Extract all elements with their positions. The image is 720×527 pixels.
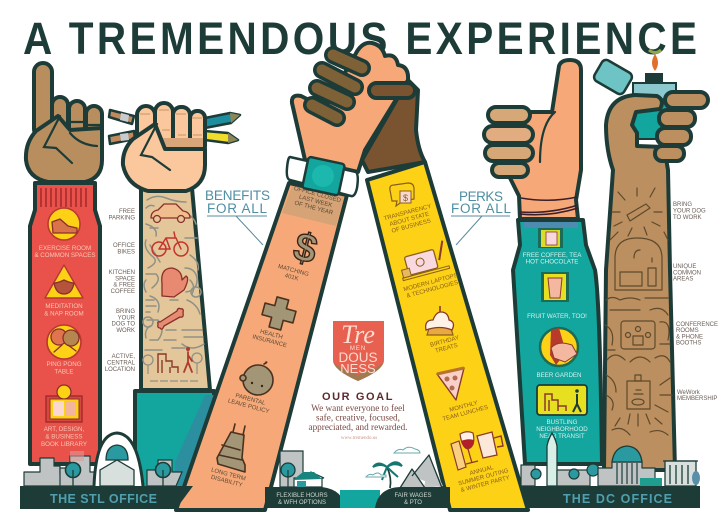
labels: DC perks list: ROOMS — [676, 328, 699, 334]
labels: STL benefits list: BIKES — [117, 250, 135, 256]
text: goal statement: safe, creative, focused, — [316, 412, 400, 422]
icon: laptop — [396, 241, 450, 281]
icon: pointing hand — [26, 63, 102, 182]
water — [340, 490, 380, 508]
text: goal statement: appreciated, and rewarded. — [309, 422, 407, 432]
icon: handshake peach hand — [292, 43, 408, 172]
text: health insurance: INSURANCE — [252, 334, 287, 349]
text: exercise room: EXERCISE ROOM — [39, 245, 91, 252]
text: benefits for all: BENEFITS — [205, 188, 270, 203]
icon: thumbs up hand — [484, 60, 581, 219]
text: perks for all: FOR ALL — [451, 201, 511, 216]
icon: baby face — [240, 362, 273, 395]
text: art, design: BOOK LIBRARY — [41, 441, 87, 448]
text: art, design: ART, DESIGN, — [44, 426, 84, 433]
icon: watch — [287, 157, 358, 196]
icon: bracelets — [520, 197, 578, 215]
title: A TREMENDOUS EXPERIENCE — [23, 14, 697, 65]
text: matching 401k: MATCHING — [277, 264, 309, 278]
labels: DC perks list: WeWork — [677, 390, 700, 396]
text: long term disability: DISABILITY — [210, 475, 243, 489]
text: office closed: OF THE YEAR — [294, 201, 334, 217]
tattoo: common room arch — [606, 232, 668, 315]
text: parental leave: LEAVE POLICY — [227, 398, 270, 415]
text: free coffee: HOT CHOCOLATE — [526, 258, 578, 266]
icon: tremendousness shield logo: DOUS — [338, 350, 378, 365]
panel: flexible hours vignette: & WFH OPTIONS — [278, 500, 326, 506]
text: fruit water: FRUIT WATER, TOO! — [527, 313, 587, 320]
text: bustling neighborhood: NEAR TRANSIT — [539, 433, 585, 440]
labels: STL benefits list: & FREE — [113, 283, 135, 289]
icon: shoe badge — [48, 208, 80, 240]
text: monthly team lunches: TEAM LUNCHES — [442, 405, 489, 423]
maze pattern — [145, 196, 204, 350]
labels: STL benefits list: KITCHEN — [109, 270, 135, 276]
labels: DC perks list: COMMON — [673, 270, 701, 276]
text: meditation: MEDITATION — [45, 303, 83, 310]
labels: DC perks list: MEMBERSHIP — [677, 396, 717, 402]
icon: oven mitt — [162, 268, 188, 297]
text: exercise room: & COMMON SPACES — [34, 252, 96, 259]
labels: DC perks list: AREAS — [673, 277, 693, 283]
text: transparency: OF BUSINESS — [391, 218, 432, 235]
text: birthday treats: TREATS — [435, 343, 459, 355]
text: birthday treats: BIRTHDAY — [430, 335, 460, 349]
text: transparency: TRANSPARENCY — [383, 204, 432, 222]
panel: our goal — [309, 320, 407, 441]
icon: beer garden badge — [540, 328, 578, 366]
labels: DC perks list: YOUR DOG — [673, 208, 706, 214]
labels: STL benefits list — [105, 209, 136, 373]
panel: fair wages vignette: & PTO — [404, 500, 422, 506]
labels: STL benefits list: WORK — [116, 328, 135, 334]
text: meditation: & NAP ROOM — [44, 310, 84, 317]
text: ping pong: PING PONG — [46, 361, 82, 368]
text: annual outing: & WINTER PARTY — [460, 475, 511, 494]
panel: brown hand and palm — [362, 80, 425, 172]
labels: STL benefits list: BRING — [116, 309, 135, 315]
text: perks for all: PERKS — [459, 189, 503, 204]
text: long term disability: LONG TERM — [210, 468, 246, 483]
icon: tremendousness shield logo: Tre — [341, 320, 375, 349]
text: transparency: ABOUT STATE — [389, 212, 430, 228]
labels: STL benefits list: ACTIVE, — [112, 354, 135, 360]
labels: DC perks list: BRING — [673, 202, 692, 208]
text: url: www.tremendo.us — [341, 436, 377, 441]
labels: STL benefits list: SPACE — [115, 276, 135, 282]
labels: STL benefits list: LOCATION — [105, 367, 135, 373]
panel: fair wages vignette: FAIR WAGES — [394, 493, 432, 499]
text: annual outing: SUMMER OUTING — [458, 468, 510, 487]
icon: tremendousness shield logo: MEN — [350, 346, 366, 352]
icon: pizza slice — [437, 368, 464, 400]
tattoo: bone with rays — [612, 188, 662, 236]
icon: meditation triangle — [45, 265, 83, 298]
text: free coffee: FREE COFFEE, TEA — [523, 252, 581, 259]
tattoo: conference room — [605, 321, 670, 362]
panel: STL red sweater arm — [30, 183, 100, 464]
icon: leg cast — [217, 424, 245, 472]
text: benefits for all — [205, 188, 270, 245]
sweater cuff ribs — [41, 188, 86, 207]
text: modern laptops: & TECHNOLOGIES — [406, 280, 459, 300]
panel: DC office bar — [521, 486, 700, 508]
labels: STL benefits list: COFFEE — [111, 289, 135, 295]
labels: DC perks list: UNIQUE — [673, 264, 696, 270]
text: bustling neighborhood: BUSTLING — [547, 419, 577, 426]
icon: tremendousness shield logo — [333, 320, 384, 381]
icon: cupcake — [426, 306, 453, 335]
icon: tremendousness shield logo: NESS — [340, 361, 376, 376]
heading: our goal: OUR GOAL — [322, 391, 394, 403]
panel: beige tattooed arm — [141, 188, 210, 390]
text: monthly team lunches: MONTHLY — [449, 400, 478, 414]
panel: flexible hours vignette: FLEXIBLE HOURS — [276, 493, 328, 499]
text: benefits for all: FOR ALL — [207, 201, 267, 216]
icon: dollar sign: $ — [289, 224, 322, 273]
icon: ping pong badge — [47, 325, 81, 359]
panel: green thumbs up sleeve — [513, 220, 602, 464]
text: annual outing: ANNUAL — [469, 465, 494, 477]
panel: teal sleeve — [135, 391, 214, 490]
icon: buildings and pedestrian — [143, 347, 202, 374]
labels: STL benefits list: YOUR — [118, 315, 136, 321]
labels: STL benefits list: CENTRAL — [107, 360, 136, 366]
panel: tan tattooed arm and hand — [604, 92, 708, 470]
panel: fair wages vignette — [366, 447, 450, 508]
text: office closed: OFFICE CLOSED — [293, 186, 341, 204]
labels: STL benefits list: DOG TO — [112, 322, 135, 328]
panel: yellow arm — [367, 162, 528, 510]
text: parental leave: PARENTAL — [235, 393, 266, 407]
icon: bicycle — [152, 232, 188, 256]
labels: STL benefits list: PARKING — [108, 216, 135, 222]
labels: STL benefits list: FREE — [119, 209, 135, 215]
icon: fruit water glass — [541, 272, 569, 302]
panel: STL office bar: THE STL OFFICE — [50, 492, 157, 506]
text: perks for all — [451, 189, 511, 245]
icon: health cross — [259, 294, 298, 333]
icon: speech bubble with dollar: $ — [403, 193, 408, 203]
text: office closed: LAST WEEK — [298, 194, 333, 209]
labels: DC perks list — [673, 202, 718, 402]
labels: DC perks list: & PHONE — [676, 334, 703, 340]
panel: peach center arm — [176, 183, 347, 510]
labels: DC perks list: BOOTHS — [676, 341, 701, 347]
icon: speech bubble with dollar — [390, 183, 414, 206]
icon: neighborhood sign — [537, 385, 587, 415]
icon: bone — [158, 308, 183, 329]
icon: car — [151, 204, 190, 222]
icon: coffee cup — [538, 228, 563, 248]
text: health insurance: HEALTH — [259, 329, 283, 341]
text: bustling neighborhood: NEIGHBORHOOD — [536, 426, 588, 433]
text: art, design: & BUSINESS — [45, 434, 83, 440]
icon: brown fingers grip — [312, 55, 415, 118]
icon: clouds — [366, 447, 420, 477]
labels: DC perks list: CONFERENCE — [676, 322, 718, 328]
panel: flexible hours vignette — [265, 451, 344, 508]
text: goal statement: We want everyone to feel — [311, 403, 405, 413]
icon: lighter — [592, 50, 676, 139]
labels: STL benefits list: OFFICE — [113, 243, 135, 249]
icon: fist holding pencils — [123, 103, 205, 191]
icon: pencils in fist — [109, 110, 240, 144]
icon: drinks — [451, 432, 503, 470]
panel: DC skyline — [521, 433, 700, 486]
text: beer garden: BEER GARDEN — [536, 372, 582, 379]
text: ping pong: TABLE — [54, 368, 74, 376]
panel: STL office bar — [20, 486, 193, 509]
labels: DC perks list: TO WORK — [673, 215, 702, 221]
text: matching 401k: 401K — [284, 273, 299, 283]
text: modern laptops: MODERN LAPTOPS — [403, 273, 459, 293]
panel: STL skyline — [24, 433, 182, 486]
tattoo: wework badge — [606, 375, 672, 435]
panel: DC office bar: THE DC OFFICE — [563, 492, 672, 506]
icon: book and light bulb — [46, 385, 82, 422]
